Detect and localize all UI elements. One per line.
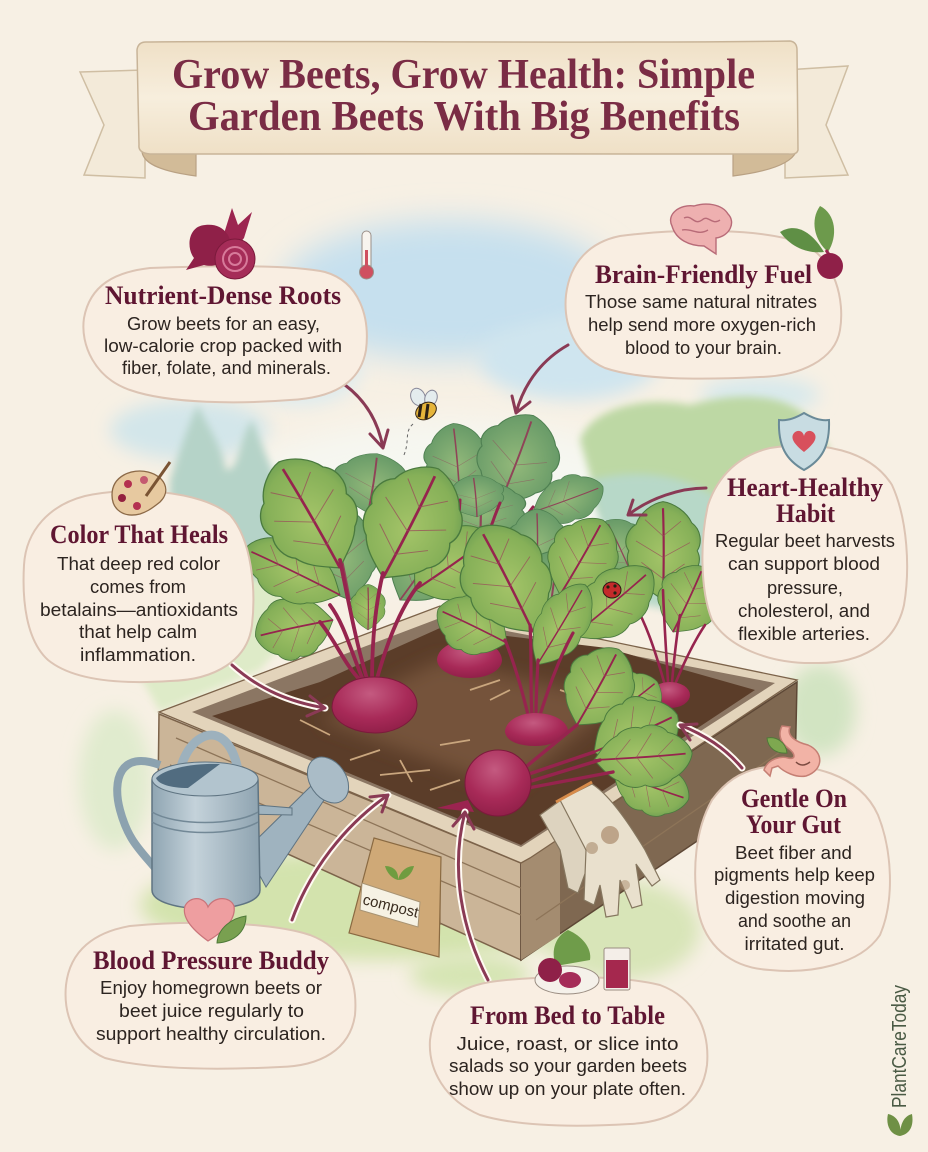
panel: blood pressure buddy (66, 923, 355, 1069)
body text: help send more oxygen-rich (588, 314, 816, 335)
body text: Juice, roast, or slice into (456, 1033, 678, 1054)
icon: ladybug (603, 582, 621, 598)
banner left fold (142, 152, 196, 176)
icon: happy stomach (764, 726, 820, 776)
body text: Grow beets for an easy, (127, 313, 320, 334)
body text: low-calorie crop packed with (104, 335, 342, 356)
body text: Enjoy homegrown beets or (100, 977, 322, 998)
icon: bee (404, 386, 440, 455)
panel: brain-friendly fuel (566, 231, 841, 379)
front beet root (505, 713, 568, 746)
body text: support healthy circulation. (96, 1023, 326, 1044)
brand credit (887, 985, 912, 1136)
icon: thermometer (360, 231, 374, 279)
body text: beet juice regularly to (119, 1000, 304, 1021)
soil (212, 628, 755, 845)
beet plant: right (582, 502, 732, 708)
heading: Brain-Friendly Fuel (595, 260, 812, 289)
heading: Gentle On (741, 784, 847, 813)
body text: pigments help keep (714, 864, 875, 885)
panel: nutrient-dense roots (83, 266, 367, 402)
title line 1: Grow Beets, Grow Health: Simple (172, 52, 755, 98)
banner left tail (80, 70, 145, 178)
bed inner wall (192, 618, 775, 847)
gardening gloves (540, 782, 660, 917)
icon: paint palette (112, 462, 170, 515)
body text: fiber, folate, and minerals. (122, 357, 331, 378)
heading: Habit (776, 499, 835, 528)
body text: betalains—antioxidants (40, 599, 238, 620)
arrow: color that heals to beet (232, 665, 325, 716)
icon: heart and leaf (184, 899, 246, 943)
icon: brain (671, 204, 732, 254)
lying beet with leaves (437, 633, 698, 826)
icon: brand leaves (887, 1114, 912, 1136)
heading: Your Gut (746, 810, 841, 839)
heading: Nutrient-Dense Roots (105, 281, 341, 310)
body text: inflammation. (80, 644, 196, 665)
body text: and soothe an (738, 910, 851, 931)
banner right tail (785, 66, 848, 178)
back beet root (437, 640, 502, 678)
body text (714, 842, 875, 954)
body text: that help calm (79, 621, 197, 642)
banner main panel (137, 41, 798, 154)
body text: blood to your brain. (625, 337, 782, 358)
bed right wall (521, 682, 797, 960)
arrow: bed to table to beet (453, 812, 488, 980)
arrow: gentle on your gut to leaves (680, 724, 742, 768)
body text: can support blood (728, 553, 880, 574)
body text: digestion moving (725, 887, 865, 908)
icon: beet root and slice (186, 208, 255, 279)
heading: Heart-Healthy (727, 473, 883, 502)
beet plant: front center (426, 503, 670, 746)
right beet root (650, 682, 690, 708)
body text (715, 530, 895, 644)
arrow: blood pressure buddy to bed (292, 795, 388, 920)
beet plant: large left (232, 439, 513, 733)
heading: From Bed to Table (470, 1001, 665, 1030)
title line 2: Garden Beets With Big Benefits (188, 94, 740, 140)
heading (727, 473, 883, 528)
icon: heart shield (779, 413, 829, 470)
heading (741, 784, 847, 839)
body text (449, 1033, 687, 1099)
raised garden bed (158, 606, 797, 960)
body text (585, 291, 817, 358)
icon: beet plate and juice (535, 930, 630, 994)
body text: flexible arteries. (738, 623, 870, 644)
body text: cholesterol, and (738, 600, 870, 621)
body text: salads so your garden beets (449, 1055, 687, 1076)
panel: heart-healthy habit (702, 445, 907, 663)
body text (104, 313, 342, 378)
compost bag: compost (361, 891, 421, 922)
arrow: heart-healthy habit to plant (628, 488, 706, 515)
compost bag (349, 838, 441, 957)
body text: show up on your plate often. (449, 1078, 686, 1099)
body text (40, 553, 238, 665)
heading: Blood Pressure Buddy (93, 946, 329, 975)
panel: color that heals (24, 491, 253, 682)
body text: Those same natural nitrates (585, 291, 817, 312)
icon: beet with leaves (780, 206, 843, 279)
body text: That deep red color (57, 553, 220, 574)
body text: comes from (90, 576, 186, 597)
bed left wall (158, 714, 521, 960)
body text: irritated gut. (744, 933, 844, 954)
brand credit: PlantCareToday (889, 985, 911, 1108)
banner right fold (733, 152, 796, 176)
body text (96, 977, 326, 1044)
title banner (80, 41, 848, 178)
arrow: brain-friendly fuel to plant (512, 345, 568, 413)
body text: pressure, (767, 577, 843, 598)
body text: Beet fiber and (735, 842, 852, 863)
watering can (117, 735, 357, 909)
watercolor garden backdrop (79, 220, 856, 995)
panel: from bed to table (430, 977, 707, 1126)
heading: Color That Heals (50, 520, 228, 549)
beet plant: back center (421, 401, 611, 678)
bed top rim (159, 606, 797, 863)
body text: Regular beet harvests (715, 530, 895, 551)
arrow: nutrient-dense roots to plant (345, 385, 388, 448)
main beet root (332, 677, 417, 733)
panel: gentle on your gut (695, 766, 890, 971)
